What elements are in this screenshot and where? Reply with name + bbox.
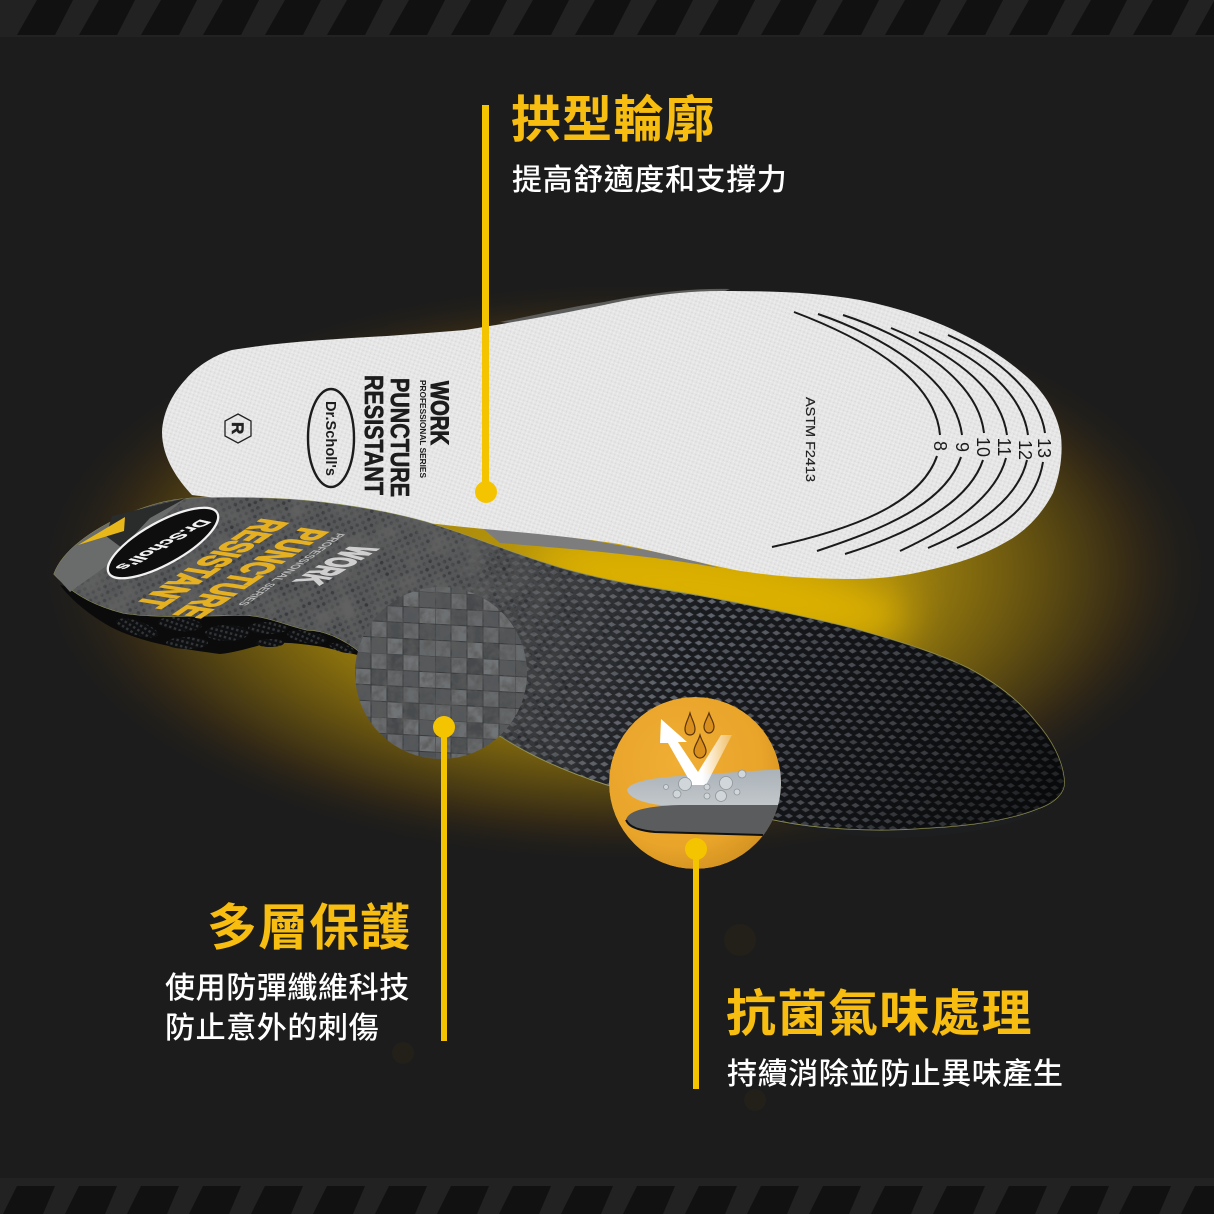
resistant: RESISTANT (125, 517, 296, 610)
faint bokeh lights (392, 924, 766, 1111)
size numbers: 10 (973, 437, 993, 457)
size numbers: 13 (1034, 438, 1054, 458)
heading: arch contour: 拱型輪廓 (511, 92, 715, 148)
callout line: arch (475, 105, 497, 503)
text: arch contour description: 提高舒適度和支撐力 (512, 164, 787, 197)
R hexagon: R (228, 422, 247, 434)
antibacterial icon circle (609, 697, 782, 869)
heel corner grey (54, 498, 186, 592)
Dr.Scholl's oval: Dr.Scholl's (322, 401, 339, 476)
top hazard stripe band (0, 0, 1214, 37)
Dr.Scholl's oval (308, 389, 354, 487)
oil drops (685, 713, 714, 758)
size numbers: 9 (952, 442, 972, 452)
insole grey top lip (500, 289, 730, 324)
heading: multilayer protection: 多層保護 (207, 900, 411, 956)
puncture: PUNCTURE (164, 526, 336, 620)
ASTM text: ASTM F2413 (803, 397, 818, 482)
text: antibacterial description: 持續消除並防止異味產生 (727, 1058, 1064, 1091)
size numbers: 8 (930, 441, 950, 451)
black insole (bottom side) (40, 490, 1080, 840)
size numbers (930, 437, 1054, 460)
text: multilayer description: 使用防彈纖維科技 (165, 972, 410, 1005)
right dark fade (715, 602, 1064, 830)
Dr.Scholl's oval: Dr.Scholl's (110, 518, 214, 571)
heel yellow triangle (78, 517, 125, 545)
yellow glow behind insoles (30, 277, 1214, 867)
puncture: PUNCTURE (385, 378, 415, 497)
professional series: PROFESSIONAL SERIES (234, 533, 347, 607)
water beads (664, 770, 746, 802)
WORK: WORK (425, 381, 453, 445)
text: multilayer description (165, 972, 410, 1045)
text: multilayer description: 防止意外的刺傷 (165, 1012, 379, 1045)
size numbers: 12 (1015, 440, 1035, 460)
size curves (772, 312, 1045, 554)
callout line: antibacterial (685, 838, 707, 1089)
size numbers: 11 (994, 438, 1014, 456)
R hexagon (225, 414, 251, 443)
callout line: multilayer (433, 716, 455, 1041)
white insole (top side) (162, 289, 1062, 579)
bottom hazard stripe band (0, 1178, 1214, 1214)
bottom mesh rim (770, 800, 1040, 838)
white arrow (660, 719, 732, 785)
Dr.Scholl's oval (99, 495, 227, 591)
bright yellow band between insoles (526, 519, 914, 661)
professional series: PROFESSIONAL SERIES (418, 380, 428, 478)
underside honeycomb (60, 585, 380, 656)
work: WORK (285, 544, 386, 587)
dark grey layer (626, 805, 778, 835)
insole grey bottom lip (480, 526, 720, 568)
carbon surface (54, 498, 1064, 830)
insole white surface (162, 291, 1062, 579)
heading: antibacterial odor: 抗菌氣味處理 (726, 986, 1033, 1042)
heel dark chevron (106, 498, 186, 548)
light grey layer (627, 769, 782, 806)
magnified checker texture circle (355, 587, 527, 759)
grey mottled heel area (54, 498, 678, 784)
resistant: RESISTANT (359, 375, 389, 495)
